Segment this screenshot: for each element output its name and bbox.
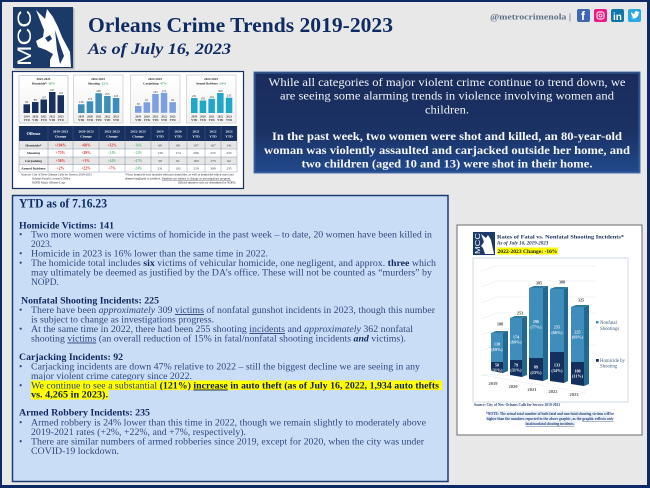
panel: alert message: two children (aged 10 and 13) were shot in their home. bbox=[302, 156, 592, 170]
chart: armed robbery: 192 bbox=[201, 96, 206, 100]
section: carjacking: Carjacking Incidents: 92 bbox=[19, 353, 123, 363]
table sources: Orleans Parish Coroner's Office bbox=[32, 176, 71, 180]
section: nonfatal shooting: is subject to change as investigations progress. bbox=[31, 316, 214, 326]
panel: alert message bbox=[254, 72, 640, 173]
chart: carjacking: YTD bbox=[152, 118, 158, 122]
bar value labels: 385 bbox=[536, 280, 542, 286]
chart note: *NOTE: The actual total number of both fatal and non-fatal shooting victims will be bbox=[486, 412, 614, 416]
section: homicide victims: Two more women were victims of homicide in the past week – to date, 20 women have been killed in bbox=[31, 230, 432, 240]
icon: small MCC logo bbox=[473, 232, 495, 255]
bar value labels: (31%) bbox=[510, 368, 522, 372]
chart: carjacking: 2022 bbox=[161, 114, 167, 118]
bar value labels: 79 bbox=[514, 362, 518, 368]
chart title: 2022-2023 Change: -16% bbox=[498, 249, 558, 255]
section: armed robbery: 2019-2021 rates (+2%, +22%, and +7%, respectively). bbox=[31, 427, 246, 438]
chart: shooting: 225 bbox=[114, 94, 119, 98]
chart: homicide: Homicide* -16% bbox=[32, 82, 55, 86]
chart: homicide: 2020 bbox=[32, 114, 39, 118]
logo: MCC bbox=[13, 7, 74, 70]
section: carjacking bbox=[19, 353, 442, 400]
chart: carjacking: 2022-2023 bbox=[148, 77, 162, 81]
chart: armed robbery: YTD bbox=[200, 118, 206, 122]
section: homicide victims: • bbox=[19, 259, 22, 269]
section: nonfatal shooting bbox=[19, 296, 436, 344]
chart: armed robbery: YTD bbox=[209, 118, 215, 122]
bar value labels: (31%) bbox=[491, 368, 503, 372]
bar value labels: 100 bbox=[574, 368, 581, 374]
chart: homicide: 2023 bbox=[58, 114, 64, 118]
chart: carjacking: 2019 bbox=[135, 114, 142, 118]
section: homicide victims: NOPD. bbox=[31, 278, 59, 288]
chart: shooting: 2022 bbox=[104, 114, 111, 118]
chart: shooting: 2022-2023 bbox=[91, 77, 105, 81]
panel: YTD details bbox=[12, 196, 448, 482]
table: offense changes: 174 bbox=[175, 151, 181, 155]
table sources: NOPD Major Offense Logs bbox=[32, 180, 66, 184]
chart: armed robbery: YTD bbox=[217, 118, 223, 122]
table: offense changes: 88 bbox=[176, 143, 180, 147]
chart: armed robbery: 309 bbox=[218, 89, 223, 93]
chart: armed robbery: 2020 bbox=[200, 114, 206, 118]
bar 2019 bbox=[491, 331, 508, 373]
icon: linkedin bbox=[611, 9, 624, 23]
chart: shooting: YTD bbox=[78, 118, 84, 122]
chart: carjacking: 92 bbox=[171, 98, 175, 102]
section: armed robbery: COVID-19 lockdown. bbox=[31, 447, 119, 457]
callout: auto theft highlight bbox=[19, 380, 442, 400]
section: nonfatal shooting: At the same time in 2022, there had been 255 shooting incidents and approximately 362 nonfatal bbox=[31, 324, 413, 335]
chart: carjacking: YTD bbox=[170, 118, 176, 122]
chart: armed robbery: 2019 bbox=[191, 114, 198, 118]
legend: Homicide by bbox=[600, 359, 626, 364]
chart: armed robbery: 219 bbox=[209, 95, 214, 99]
bar value labels: (66%) bbox=[551, 330, 563, 335]
chart: homicide: 2021 bbox=[41, 114, 47, 118]
icon: facebook: f bbox=[581, 9, 586, 23]
callout: auto theft highlight: We continue to see a substantial (121%) increase in auto theft (as of July 16, 2022, 1,934 auto thefts bbox=[31, 380, 439, 392]
chart: shooting: Shooting -12% bbox=[88, 82, 108, 86]
chart: homicide: 107 bbox=[41, 96, 46, 100]
year axis labels: 2023 bbox=[570, 392, 579, 397]
section: homicide victims: may ultimately be deemed as justified by the DA’s office. These will not be counted as “murders” by bbox=[31, 268, 432, 278]
section: homicide victims bbox=[19, 222, 436, 288]
table: offense changes: 309 bbox=[210, 166, 216, 170]
chart: armed robbery: 2022 bbox=[217, 114, 224, 118]
table: offense changes: YTD bbox=[209, 134, 217, 138]
table: offense changes: +7% bbox=[108, 166, 116, 170]
chart: homicide: YTD bbox=[24, 118, 30, 122]
panel: alert message: are seeing some alarming trends in violence involving women and bbox=[280, 88, 614, 102]
chart: armed robbery: 2021 bbox=[209, 114, 215, 118]
bar value labels: (69%) bbox=[510, 340, 522, 344]
table: offense changes: 2019 bbox=[156, 130, 164, 134]
subtitle: As of July 16, 2023 bbox=[87, 41, 231, 58]
section: nonfatal shooting: There have been approximately 309 victims of nonfatal gunshot incidents in 2023, though this number bbox=[31, 305, 436, 316]
heading: YTD: YTD as of 7.16.23 bbox=[19, 196, 107, 210]
table: offense changes: YTD bbox=[156, 134, 164, 138]
table: offense changes: YTD bbox=[192, 134, 200, 138]
chart: shooting: 2021 bbox=[96, 114, 102, 118]
table: offense changes: Armed Robbery bbox=[21, 166, 46, 170]
table: offense changes: +104% bbox=[55, 143, 66, 147]
chart note bbox=[486, 411, 614, 426]
table: offense changes: -44% bbox=[108, 159, 116, 163]
chart: shooting: 174 bbox=[88, 97, 93, 101]
legend: Nonfatal bbox=[600, 321, 617, 326]
table: offense changes: Offense bbox=[27, 131, 40, 136]
icon: small MCC logo: MCC bbox=[475, 233, 482, 254]
table sources: deemed negligent or justified. Numbers are subject to change as investigations progress. bbox=[125, 176, 231, 180]
chart: carjacking: 163 bbox=[153, 90, 158, 94]
year axis labels: 2019 bbox=[488, 381, 498, 386]
table: offense changes: 107 bbox=[193, 143, 199, 147]
section: homicide victims: Homicide Victims: 141 bbox=[19, 222, 114, 232]
bar value labels: 388 bbox=[559, 280, 565, 284]
bar value labels: (77%) bbox=[530, 324, 542, 330]
section: homicide victims: • bbox=[19, 250, 22, 260]
bar value labels: 130 bbox=[494, 342, 500, 346]
table: offense changes: +22% bbox=[81, 166, 91, 170]
chart: homicide: 69 bbox=[25, 100, 29, 104]
section: nonfatal shooting: • bbox=[19, 306, 22, 316]
table: offense changes: 2023 bbox=[226, 130, 233, 134]
bar 2023 bbox=[571, 305, 589, 386]
panel: crime trends summary bbox=[12, 72, 244, 188]
panel: alert message: woman was violently assaulted and carjacked outside her home, and bbox=[264, 143, 630, 157]
table: offense changes: 235 bbox=[226, 166, 232, 170]
bar value labels: (69%) bbox=[491, 347, 503, 352]
table: offense changes: 255 bbox=[210, 151, 216, 155]
table sources bbox=[21, 172, 236, 184]
table: offense changes: +60% bbox=[81, 143, 91, 147]
icon: instagram bbox=[594, 9, 607, 22]
chart: homicide: 88 bbox=[34, 98, 37, 102]
table: offense changes: +56% bbox=[56, 159, 66, 163]
chart title bbox=[496, 234, 624, 255]
chart: shooting: YTD bbox=[104, 118, 110, 122]
chart: homicide: YTD bbox=[58, 118, 64, 122]
section: homicide victims: • bbox=[19, 230, 22, 240]
social handle: @metrocrimenola | bbox=[490, 12, 571, 22]
logo: MCC: MCC bbox=[15, 10, 36, 66]
bar value labels: (23%) bbox=[530, 370, 542, 375]
chart: shooting: 296 bbox=[96, 89, 101, 93]
chart: carjacking: YTD bbox=[161, 118, 167, 122]
chart: homicide: YTD bbox=[49, 118, 55, 122]
section: carjacking: • bbox=[19, 362, 22, 372]
table: offense changes: 2020 bbox=[174, 130, 182, 134]
chart: homicide bbox=[19, 76, 68, 123]
bar 2021 bbox=[529, 286, 548, 381]
chart: shooting: YTD bbox=[113, 118, 119, 122]
chart: armed robbery: 235 bbox=[227, 94, 232, 98]
table: offense changes: Change bbox=[106, 134, 118, 138]
bar 2022 bbox=[550, 287, 568, 383]
table: offense changes: 219 bbox=[193, 166, 199, 170]
chart: armed robbery: YTD bbox=[226, 118, 232, 122]
bar value labels: 325 bbox=[578, 298, 584, 302]
chart: homicide: 141 bbox=[58, 91, 63, 95]
table: offense changes: 130 bbox=[157, 151, 163, 155]
table: offense changes: +73% bbox=[56, 151, 66, 155]
bar value labels: 225 bbox=[574, 330, 581, 334]
bar value labels: 174 bbox=[513, 334, 520, 340]
year axis labels bbox=[488, 381, 579, 397]
table: offense changes: +2% bbox=[57, 166, 65, 170]
table: offense changes: Change bbox=[80, 134, 92, 138]
section: nonfatal shooting: shooting victims (an overall reduction of 15% in fatal/nonfatal shooting incidents and victims). bbox=[31, 334, 406, 344]
bar value labels: 58 bbox=[495, 362, 499, 368]
chart: shooting: YTD bbox=[96, 118, 102, 122]
callout: auto theft highlight: vs. 4,265 in 2023). bbox=[31, 390, 108, 400]
table: offense changes: YTD bbox=[174, 134, 182, 138]
chart: homicide: YTD bbox=[41, 118, 47, 122]
year axis labels: 2020 bbox=[508, 384, 518, 389]
icon: twitter bbox=[628, 9, 641, 22]
chart: carjacking: 2021 bbox=[153, 114, 159, 118]
table: offense changes: -47% bbox=[134, 159, 142, 163]
table: offense changes: -16% bbox=[134, 143, 142, 147]
table: offense changes: 173 bbox=[210, 159, 216, 163]
section: armed robbery: • bbox=[19, 438, 22, 448]
chart: carjacking bbox=[130, 75, 180, 123]
table: offense changes: -12% bbox=[134, 151, 142, 155]
chart: homicide: YTD bbox=[32, 118, 38, 122]
table: offense changes bbox=[19, 126, 237, 172]
table: offense changes: 231 bbox=[157, 166, 163, 170]
chart: carjacking: 173 bbox=[162, 89, 167, 93]
bar 2020 bbox=[510, 316, 527, 377]
table: offense changes: 2021-2023 bbox=[104, 130, 120, 134]
bar value labels: 253 bbox=[517, 310, 523, 316]
bar value labels: (31%) bbox=[572, 374, 584, 378]
chart: carjacking: 2023 bbox=[170, 114, 176, 118]
table: offense changes: 2021 bbox=[192, 130, 200, 134]
table: offense changes: 2020-2023 bbox=[78, 130, 94, 134]
panel: alert message: In the past week, two women were shot and killed, an 80-year-old bbox=[272, 129, 622, 143]
bar value labels: (34%) bbox=[551, 368, 563, 373]
legend: Shootings bbox=[600, 327, 619, 332]
year axis labels: 2021 bbox=[528, 387, 537, 392]
section: armed robbery: • bbox=[19, 418, 22, 428]
table: offense changes: Carjacking bbox=[25, 159, 42, 163]
section: armed robbery: Armed Robbery Incidents: 235 bbox=[19, 408, 150, 418]
chart title: As of July 16, 2019-2023 bbox=[496, 242, 549, 246]
table: offense changes: 69 bbox=[158, 143, 162, 147]
legend bbox=[596, 321, 626, 370]
chart: armed robbery: 2023 bbox=[226, 114, 232, 118]
icon: facebook bbox=[577, 9, 590, 23]
chart: homicide: 2022 bbox=[49, 114, 56, 118]
chart: shooting: YTD bbox=[87, 118, 93, 122]
icon: linkedin: in bbox=[613, 12, 622, 23]
chart: homicide: 2022-2023 bbox=[37, 77, 51, 81]
table: offense changes: YTD bbox=[225, 134, 233, 138]
table: offense changes: 2022 bbox=[210, 130, 217, 134]
chart: armed robbery: 2022-2023 bbox=[204, 77, 218, 81]
chart: shooting: 2019 bbox=[78, 114, 85, 118]
table: offense changes: 192 bbox=[175, 166, 181, 170]
table: offense changes: 2022-2023 bbox=[130, 130, 146, 134]
panel: alert message: While all categories of major violent crime continue to trend down, we bbox=[268, 75, 626, 89]
chart: armed robbery bbox=[186, 75, 236, 123]
chart: shooting: 2023 bbox=[113, 114, 119, 118]
3D stacked bar chart bbox=[473, 258, 628, 402]
chart: carjacking: 2020 bbox=[144, 114, 150, 118]
section: nonfatal shooting: • bbox=[19, 325, 22, 335]
table: offense changes: 141 bbox=[226, 143, 232, 147]
table: offense changes: 163 bbox=[193, 159, 199, 163]
bar value labels: (69%) bbox=[572, 334, 584, 340]
chart: carjacking: YTD bbox=[135, 118, 141, 122]
section: carjacking: Carjacking incidents are down 47% relative to 2022 – still the biggest decline we are seeing in any bbox=[31, 362, 420, 372]
table: offense changes: 225 bbox=[226, 151, 232, 155]
chart: armed robbery: 231 bbox=[192, 94, 197, 98]
bar value labels bbox=[491, 280, 584, 378]
title: Orleans Crime Trends 2019-2023 bbox=[88, 13, 393, 37]
chart: shooting: 2020 bbox=[87, 114, 93, 118]
chart note: fatal/nonfatal shooting incidents. bbox=[526, 422, 575, 426]
table: offense changes: 167 bbox=[210, 143, 216, 147]
table: offense changes: Change bbox=[132, 134, 144, 138]
year axis labels: 2022 bbox=[548, 389, 558, 394]
chart: carjacking: 91 bbox=[145, 98, 149, 102]
section: armed robbery: There are similar numbers of armed robberies since 2019, except for 2020, when the city was under bbox=[31, 436, 425, 448]
bar value labels: 89 bbox=[534, 364, 538, 370]
section: homicide victims: The homicide total includes six victims of vehicular homicide, one negligent, and approx. three which bbox=[31, 258, 436, 269]
chart: armed robbery: Armed Robbery -24% bbox=[196, 82, 226, 86]
chart: carjacking: Carjacking -47% bbox=[143, 82, 167, 86]
table: offense changes: +1% bbox=[82, 159, 90, 163]
section: homicide victims: 2023. bbox=[31, 240, 52, 250]
section: armed robbery: Armed robbery is 24% lower than this time in 2022, though we remain slightly to moderately above bbox=[31, 418, 426, 428]
table sources: *Note: homicide total includes vehicular homicides, as well as homicides which were later bbox=[125, 172, 234, 178]
chart: carjacking: YTD bbox=[144, 118, 150, 122]
bar value labels: 296 bbox=[533, 319, 539, 324]
table: offense changes: 92 bbox=[227, 159, 231, 163]
section: nonfatal shooting: Nonfatal Shooting Incidents: 225 bbox=[21, 296, 159, 306]
section: armed robbery bbox=[19, 408, 426, 457]
chart: shooting: 130 bbox=[79, 100, 84, 104]
chart: shooting bbox=[74, 75, 123, 123]
table: offense changes: 91 bbox=[176, 159, 180, 163]
chart: homicide: 2019 bbox=[24, 114, 30, 118]
legend: Shooting bbox=[600, 364, 618, 370]
chart: armed robbery: YTD bbox=[191, 118, 197, 122]
bar value labels: 255 bbox=[554, 324, 560, 330]
table: offense changes: 296 bbox=[193, 151, 199, 155]
bar value labels: 133 bbox=[554, 362, 560, 368]
table sources: Sources: City of New Orleans Calls for Service 2019-2023 bbox=[21, 172, 92, 176]
callout: auto theft highlight: • bbox=[19, 382, 22, 392]
table: offense changes: -24% bbox=[108, 151, 116, 155]
table: offense changes: Shooting bbox=[27, 151, 40, 155]
chart note: higher than the numbers reported in the above graphic, as the graphic reflects only bbox=[486, 417, 614, 421]
table: offense changes: +29% bbox=[81, 151, 91, 155]
panel: alert message: children. bbox=[425, 102, 469, 116]
section: homicide victims: Homicide in 2023 is 16% lower than the same time in 2022. bbox=[31, 250, 268, 260]
chart: homicide: 167 bbox=[50, 88, 55, 92]
table: offense changes: Homicide* bbox=[25, 143, 42, 147]
table: offense changes: -24% bbox=[134, 166, 142, 170]
chart: carjacking: 59 bbox=[137, 102, 140, 106]
section: carjacking: major violent crime category since 2022. bbox=[31, 372, 192, 382]
chart title: Rates of Fatal vs. Nonfatal Shooting Incidents* bbox=[497, 234, 624, 240]
table sources: Official murder totals are determined by NOPD. bbox=[178, 180, 236, 184]
table: offense changes: 2019-2023 bbox=[53, 130, 68, 134]
table: offense changes: +32% bbox=[107, 143, 117, 147]
table: offense changes: 59 bbox=[158, 159, 162, 163]
panel: shooting incidents chart bbox=[457, 225, 642, 435]
chart source: Source: City of New Orleans Calls for Service 2019-2023 bbox=[474, 402, 560, 407]
chart: shooting: 255 bbox=[105, 92, 110, 96]
bar value labels: 188 bbox=[497, 322, 503, 326]
table: offense changes: Change bbox=[55, 134, 67, 138]
